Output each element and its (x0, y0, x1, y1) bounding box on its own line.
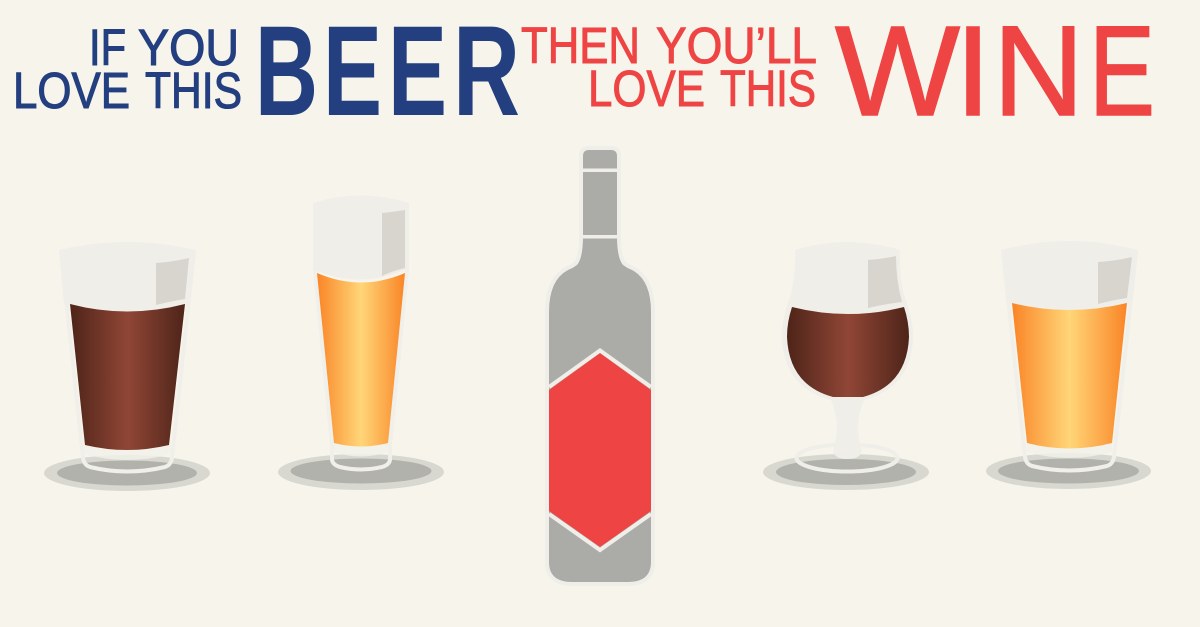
heading: if you love this beer: YOU (138, 19, 239, 76)
heading: if you love this beer: IF (89, 19, 126, 76)
heading: then you'll love this wine: YOU’LL (656, 17, 817, 74)
heading: then you'll love this wine: N (993, 0, 1084, 143)
glass: amber pilsner (278, 196, 444, 490)
heading: if you love this beer: LOVE (13, 62, 130, 119)
heading: if you love this beer: E (388, 0, 447, 143)
glass: dark tulip (763, 242, 929, 490)
heading: then you'll love this wine: W (835, 0, 960, 143)
wine bottle (549, 150, 651, 582)
heading: then you'll love this wine: THEN (521, 17, 640, 74)
heading: if you love this beer: R (453, 0, 520, 143)
heading: if you love this beer: THIS (145, 62, 242, 119)
glass: dark pint (44, 242, 210, 491)
heading: if you love this beer (13, 0, 520, 143)
heading: then you'll love this wine: LOVE (588, 60, 705, 117)
heading: if you love this beer: B (255, 0, 318, 143)
heading: then you'll love this wine: THIS (720, 60, 816, 117)
heading: then you'll love this wine: E (1089, 0, 1155, 143)
heading: then you'll love this wine (521, 0, 1155, 143)
heading: then you'll love this wine: I (955, 0, 991, 143)
glass: amber pint (986, 241, 1151, 489)
heading: if you love this beer: E (323, 0, 382, 143)
